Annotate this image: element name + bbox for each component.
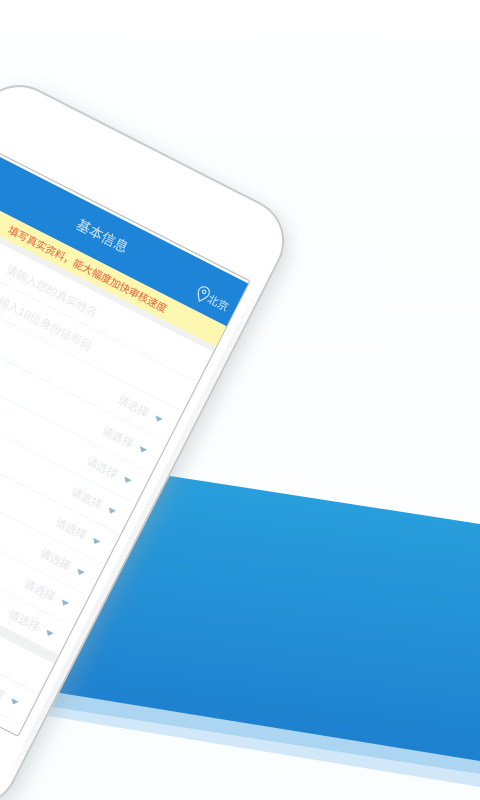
page title: 基本信息	[74, 216, 131, 256]
select placeholders: 请选择	[69, 484, 104, 512]
blue panel	[0, 476, 480, 761]
phone shadow	[0, 77, 302, 800]
name placeholder: 请输入您的真实姓名	[4, 262, 100, 320]
select placeholders: 请选择	[22, 576, 58, 604]
screen	[0, 90, 250, 736]
upper light band of blue panel	[0, 680, 480, 774]
phone	[0, 25, 304, 800]
location label: 北京	[205, 292, 231, 314]
select placeholders: 请选择	[100, 423, 136, 451]
grey separator below notice	[0, 156, 216, 352]
select placeholders: 请选择	[53, 515, 89, 542]
select placeholders: 请选择	[84, 454, 120, 481]
notice strip	[0, 136, 226, 347]
select placeholders: 请选择	[116, 393, 151, 420]
screen background	[0, 90, 250, 736]
lower light band of blue panel	[0, 690, 480, 787]
phone side bevel	[6, 276, 267, 782]
grey section separator	[0, 465, 59, 664]
notice text: 填写真实资料，能大幅度加快审核速度	[6, 224, 169, 315]
app header bar	[0, 93, 248, 326]
select placeholders: 请选择	[6, 607, 42, 634]
dropdown arrows	[9, 415, 163, 706]
select placeholders: 请选择	[37, 546, 73, 573]
phone body	[0, 72, 298, 800]
form rows	[0, 172, 208, 725]
row divider lines	[0, 192, 195, 724]
icon: location pin	[194, 285, 211, 304]
select placeholders	[0, 393, 151, 703]
